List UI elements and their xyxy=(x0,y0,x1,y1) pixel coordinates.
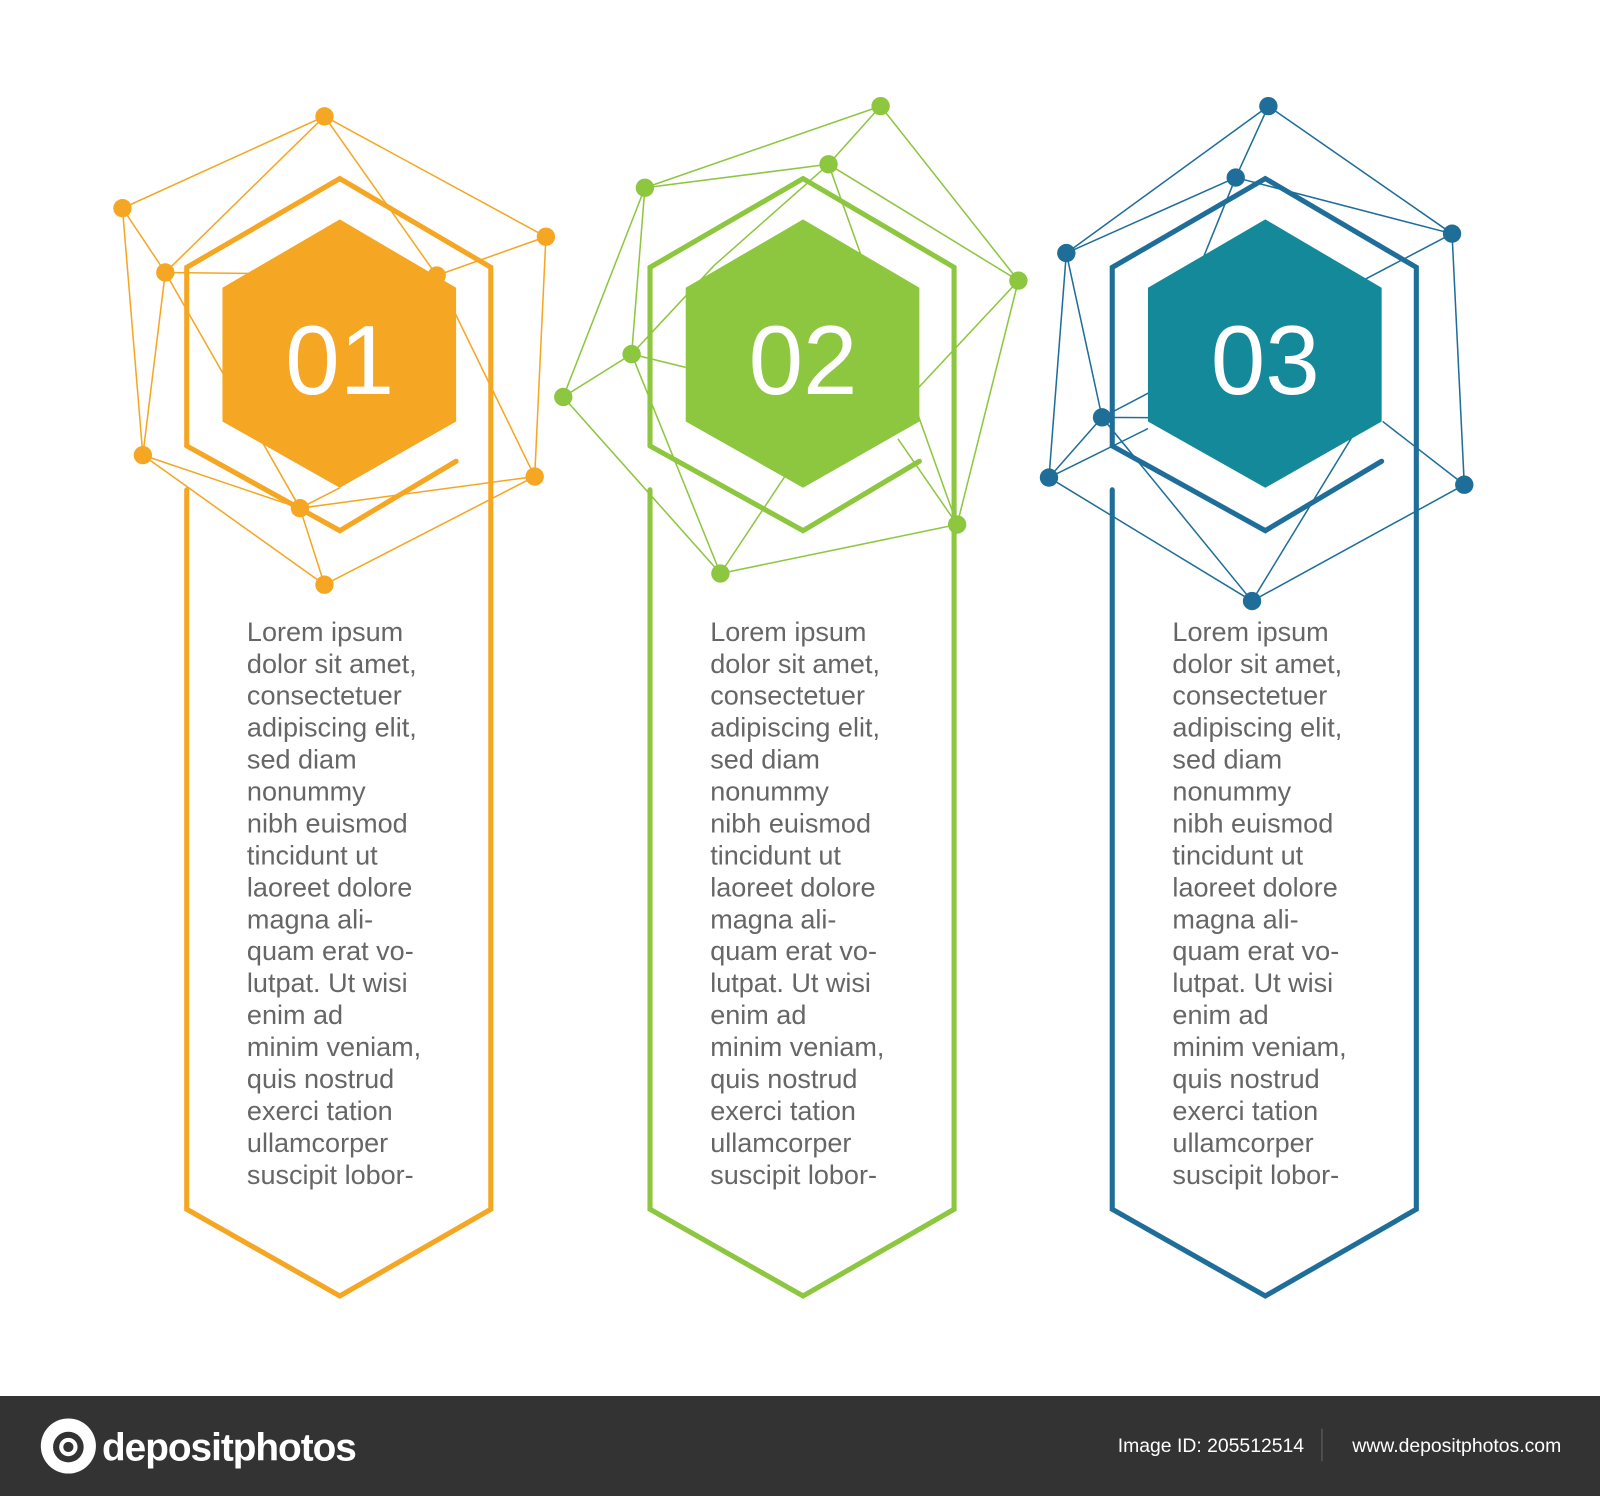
text: body 03: suscipit lobor- xyxy=(1172,1160,1339,1190)
text: body 01: laoreet dolore xyxy=(247,872,412,902)
text: body 03: consectetuer xyxy=(1172,681,1327,711)
text: body 03: quam erat vo- xyxy=(1172,936,1339,966)
text: body 01: sed diam xyxy=(247,745,357,775)
text: body 02: sed diam xyxy=(710,745,820,775)
text: body 02: suscipit lobor- xyxy=(710,1160,877,1190)
text: body 01: Lorem ipsum xyxy=(247,617,403,647)
footer info: Image ID: 205512514 xyxy=(1118,1435,1304,1457)
outline: green hexagon frame xyxy=(650,179,954,1296)
network: blue xyxy=(1040,97,1473,610)
text: body 03: exerci tation xyxy=(1172,1096,1318,1126)
badge: 03 xyxy=(1148,219,1382,488)
text: body 03: magna ali- xyxy=(1172,904,1299,934)
text: body 01: quam erat vo- xyxy=(247,936,414,966)
text: body 03: adipiscing elit, xyxy=(1172,713,1342,743)
text: body 03: enim ad xyxy=(1172,1000,1269,1030)
text: body 02: nibh euismod xyxy=(710,808,871,838)
footer info: www.depositphotos.com xyxy=(1351,1435,1561,1457)
text: body 03: laoreet dolore xyxy=(1172,872,1338,902)
text: body 01: adipiscing elit, xyxy=(247,713,417,743)
text: body 03: nonummy xyxy=(1172,777,1292,807)
panel: step 03 xyxy=(1040,97,1473,1296)
panel: step 01 xyxy=(113,107,555,1296)
text: body 01: suscipit lobor- xyxy=(247,1160,414,1190)
text: body 02: laoreet dolore xyxy=(710,872,876,902)
text: body 01: lutpat. Ut wisi xyxy=(247,968,408,998)
text: body 02: consectetuer xyxy=(710,681,865,711)
logo text: depositphotos xyxy=(102,1426,356,1469)
badge: 01: 01 xyxy=(285,305,394,415)
text: body 02: nonummy xyxy=(710,777,829,807)
text: body 02: tincidunt ut xyxy=(710,840,841,870)
text: body 02: ullamcorper xyxy=(710,1128,851,1158)
text: body 02: quam erat vo- xyxy=(710,936,877,966)
text: body 03: dolor sit amet, xyxy=(1172,649,1342,679)
text: body 03: Lorem ipsum xyxy=(1172,617,1329,647)
text: body 03: ullamcorper xyxy=(1172,1128,1314,1158)
outline: orange hexagon frame xyxy=(187,179,491,1296)
footer info xyxy=(1118,1429,1561,1461)
footer bar xyxy=(0,1396,1600,1496)
text: body 01: nibh euismod xyxy=(247,808,408,838)
text: body 02: enim ad xyxy=(710,1000,806,1030)
text: body 03: minim veniam, xyxy=(1172,1032,1347,1062)
text: body 01: exerci tation xyxy=(247,1096,393,1126)
icon: camera logo xyxy=(41,1418,96,1474)
text: body 02: minim veniam, xyxy=(710,1032,884,1062)
text: body 01: ullamcorper xyxy=(247,1128,388,1158)
badge: 01 xyxy=(222,219,456,488)
panel: step 02 xyxy=(554,97,1028,1296)
text: body 02: lutpat. Ut wisi xyxy=(710,968,871,998)
text: body 01: tincidunt ut xyxy=(247,840,378,870)
text: body 03: quis nostrud xyxy=(1172,1064,1320,1094)
text: body 03: sed diam xyxy=(1172,745,1282,775)
network: orange xyxy=(113,107,555,594)
badge: 03: 03 xyxy=(1211,305,1320,415)
text: body 02: exerci tation xyxy=(710,1096,856,1126)
text: body 03: tincidunt ut xyxy=(1172,840,1304,870)
text: body 02: magna ali- xyxy=(710,904,836,934)
text: body 02: dolor sit amet, xyxy=(710,649,880,679)
badge: 02 xyxy=(686,219,919,488)
network: green xyxy=(554,97,1028,583)
text: body 01: quis nostrud xyxy=(247,1064,394,1094)
text: body 01: consectetuer xyxy=(247,681,402,711)
text: body 01: minim veniam, xyxy=(247,1032,421,1062)
badge: 02: 02 xyxy=(749,305,858,415)
text: body 01: dolor sit amet, xyxy=(247,649,417,679)
text: body 03: nibh euismod xyxy=(1172,808,1333,838)
text: body 01: nonummy xyxy=(247,777,366,807)
text: body 02: adipiscing elit, xyxy=(710,713,880,743)
text: body 02: quis nostrud xyxy=(710,1064,857,1094)
text: body 02: Lorem ipsum xyxy=(710,617,866,647)
outline: blue hexagon frame xyxy=(1112,179,1416,1296)
text: body 03: lutpat. Ut wisi xyxy=(1172,968,1333,998)
text: body 01: magna ali- xyxy=(247,904,373,934)
text: body 01: enim ad xyxy=(247,1000,343,1030)
